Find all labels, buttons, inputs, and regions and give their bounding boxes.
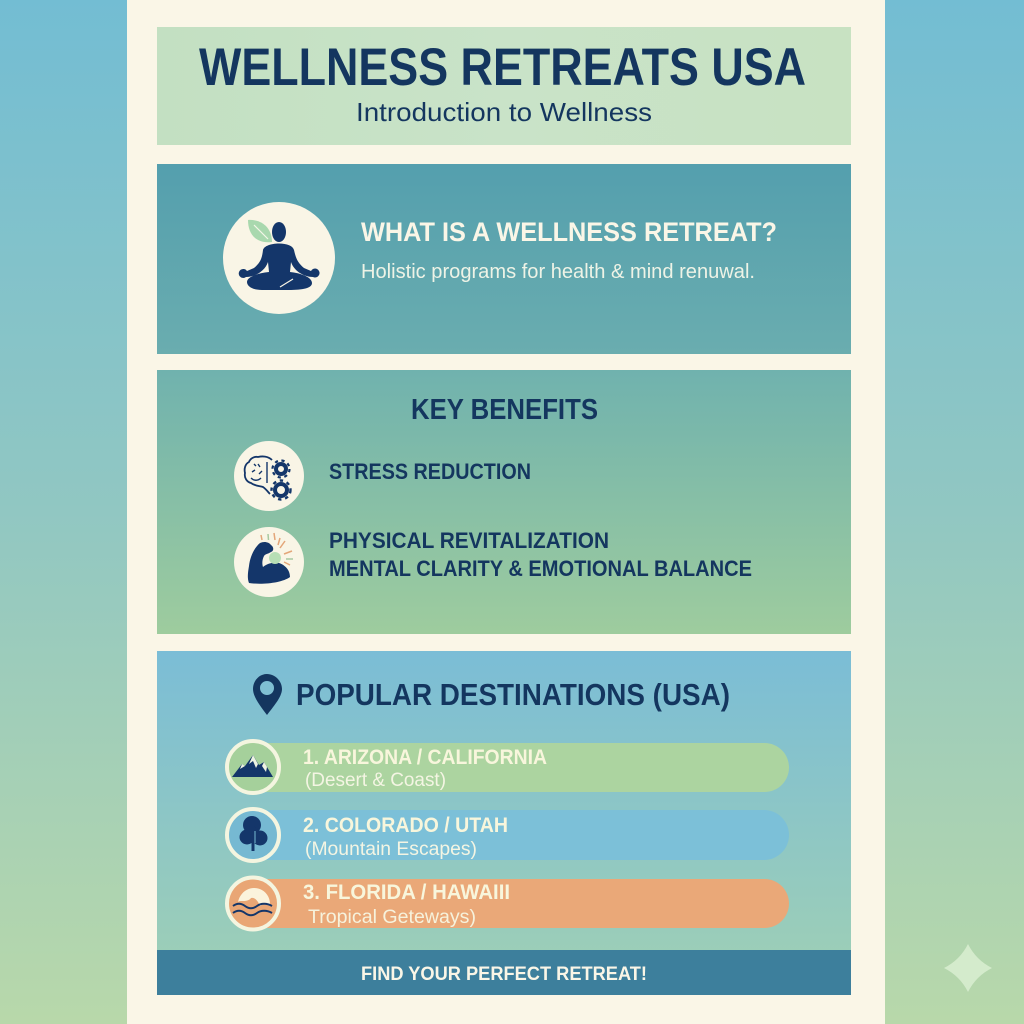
destination 1 [227,741,789,793]
cream page column [127,0,885,1024]
benefit: stress reduction: STRESS REDUCTION [329,459,531,484]
call to action banner: FIND YOUR PERFECT RETREAT! [361,964,647,985]
panel: key benefits [157,370,851,634]
heading: POPULAR DESTINATIONS (USA) [296,677,730,712]
destination 1: 1. ARIZONA / CALIFORNIA [303,746,547,769]
icon: brain and gears [234,441,304,511]
icon: flexed arm [234,527,304,597]
call to action banner [157,950,851,995]
heading: WHAT IS A WELLNESS RETREAT? [361,217,777,247]
destination 2: (Mountain Escapes) [305,839,477,860]
destination 3: 3. FLORIDA / HAWAIII [303,881,510,904]
panel: popular destinations [157,651,851,995]
icon: map pin [253,674,282,715]
benefit: mental clarity: MENTAL CLARITY & EMOTIONAL BALANCE [329,556,752,581]
destination 2: 2. COLORADO / UTAH [303,814,508,837]
subtitle: Introduction to Wellness [356,97,652,127]
description: Holistic programs for health & mind renuwal. [361,261,755,283]
destination 3 [227,878,789,930]
destination 2 [227,809,789,861]
panel: what is a wellness retreat [157,164,851,354]
icon: sparkle watermark [944,944,992,992]
destination 3: Tropical Geteways) [308,907,476,928]
icon: meditating person [223,202,335,314]
panel: title [157,27,851,145]
destination 1: (Desert & Coast) [305,770,446,791]
benefit: physical revitalization: PHYSICAL REVITALIZATION [329,528,609,553]
heading: KEY BENEFITS [411,394,598,426]
title: WELLNESS RETREATS USA [199,38,806,97]
